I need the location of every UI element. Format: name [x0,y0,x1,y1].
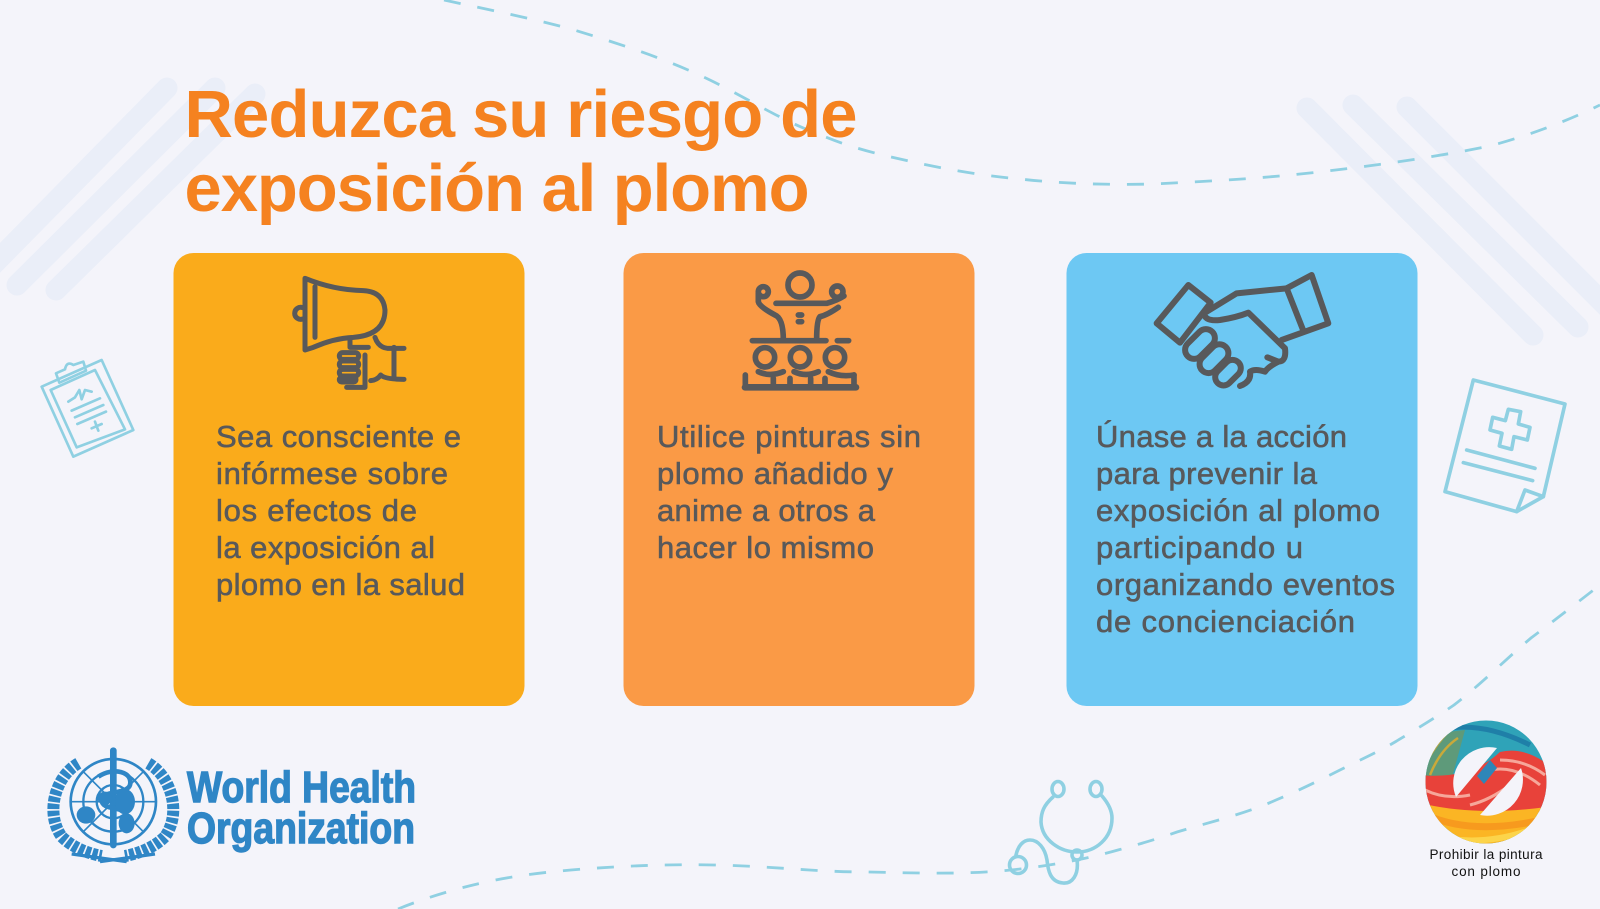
caption: ban lead paint [1430,847,1543,879]
text: join the action [1096,419,1395,639]
icon: medical document [1445,380,1565,512]
panel: lead-free paints [624,253,974,706]
wordmark [187,763,416,853]
text: join the action: exposición al plomo [1096,493,1380,528]
text: awareness: plomo en la salud [216,567,465,602]
text: join the action: de concienciación [1096,604,1355,639]
text: awareness: Sea consciente e [216,419,461,454]
panel: awareness [174,253,524,706]
wordmark: World Health [187,763,416,812]
title [184,77,858,226]
text: join the action: organizando eventos [1096,567,1395,602]
icon: handshake [1157,275,1328,389]
text: join the action: para prevenir la [1096,456,1318,491]
text: awareness: los efectos de [216,493,417,528]
text: lead-free paints: Utilice pinturas sin [657,419,921,454]
text: awareness: la exposición al [216,530,435,565]
text: awareness [216,419,465,602]
wordmark: Organization [187,804,415,853]
text: lead-free paints [657,419,921,565]
caption: ban lead paint: Prohibir la pintura [1430,847,1543,862]
logo: World Health Organization [53,751,416,862]
text: join the action: Únase a la acción [1096,419,1347,454]
emblem: WHO [53,751,173,862]
icon: ban lead paint emblem [1426,720,1546,844]
icon: speaker and audience [745,273,856,387]
title: exposición al plomo [184,151,810,226]
text: lead-free paints: hacer lo mismo [657,530,874,565]
icon: clipboard [42,360,133,457]
icon: megaphone held in hand [295,278,404,387]
icon: stethoscope [1010,782,1112,883]
caption: ban lead paint: con plomo [1452,864,1520,879]
panel: join the action [1066,253,1418,706]
text: awareness: infórmese sobre [216,456,448,491]
text: lead-free paints: plomo añadido y [657,456,894,491]
text: join the action: participando u [1096,530,1303,565]
title: Reduzca su riesgo de [184,77,858,152]
text: lead-free paints: anime a otros a [657,493,876,528]
